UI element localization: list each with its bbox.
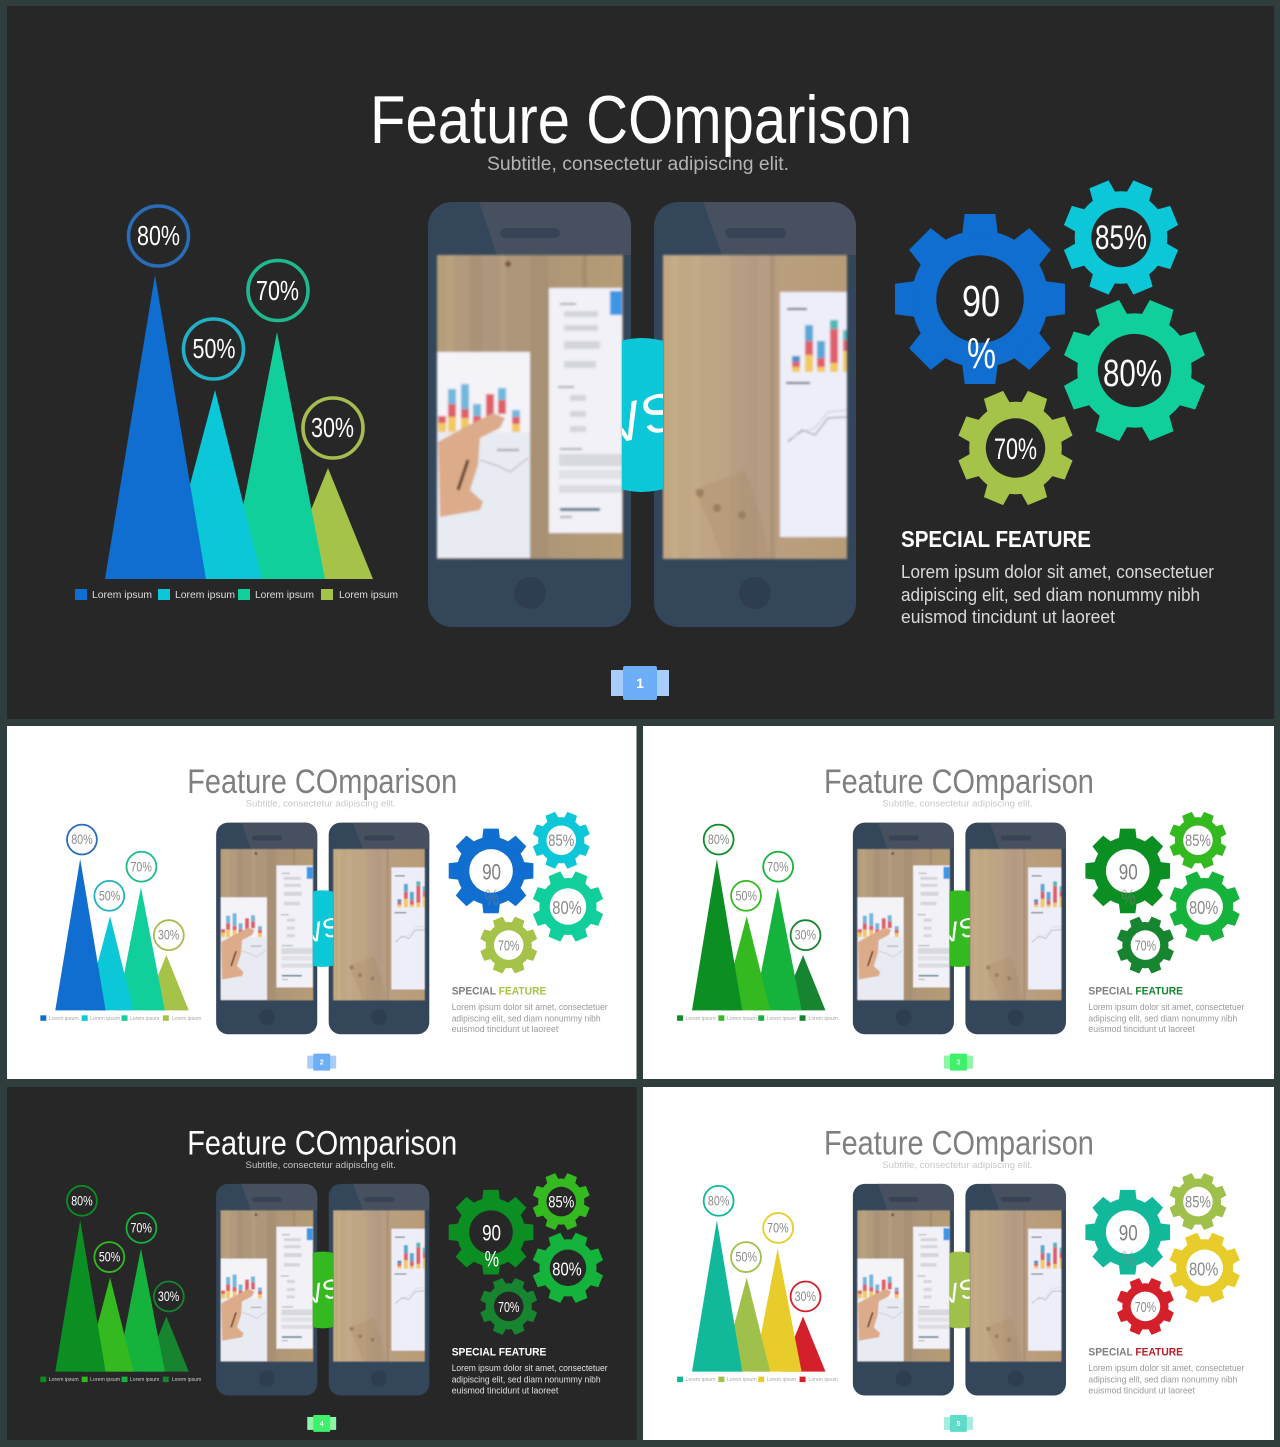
gear 90%: 90 [1119,1221,1138,1246]
special feature body: Lorem ipsum dolor sit amet, consectetuer [452,1002,608,1012]
gear 90% [1085,829,1170,913]
VS badge [949,1252,970,1328]
phones [853,1184,1066,1396]
special feature heading: SPECIAL FEATURE [1088,1347,1183,1359]
page badge 1 [611,666,669,700]
mountain chart [55,1186,189,1372]
special feature heading: SPECIAL FEATURE [1088,985,1183,997]
gear 90%: % [1121,885,1136,910]
label 30%: 30% [158,927,179,943]
special feature body: euismod tincidunt ut laoreet [1088,1386,1195,1396]
page badge 4: 4 [320,1421,324,1428]
subtitle: Subtitle, consectetur adipiscing elit. [882,799,1033,810]
label 50%: 50% [99,887,120,903]
gear 90% [895,214,1065,384]
label 50% [94,881,124,911]
chart legend: Lorem ipsum [130,1016,159,1022]
label 80% [704,825,734,854]
gear 70% [471,1269,546,1344]
special feature body [1088,1002,1244,1034]
gear 80%: 80% [1189,898,1219,919]
label 80% [704,1186,734,1216]
VS badge: VS [599,380,685,457]
chart legend: Lorem ipsum [175,589,235,601]
special feature body: euismod tincidunt ut laoreet [1088,1024,1195,1034]
gear 85% [524,1164,599,1239]
slide 4: dark slide, green palette [7,1087,636,1440]
label 30% [791,920,820,950]
page badge 2: 2 [320,1060,324,1067]
gear 90%: % [485,885,499,910]
label 30% [303,398,363,458]
phones [853,823,1066,1034]
gear 70% [1108,908,1183,983]
special feature body [452,1363,608,1396]
special feature body: adipiscing elit, sed diam nonummy nibh [1088,1375,1237,1385]
special feature body: Lorem ipsum dolor sit amet, consectetuer [452,1363,608,1373]
label 30%: 30% [311,412,354,443]
gear 90% [1085,1190,1170,1275]
label 70%: 70% [256,275,299,306]
title: Feature COmparison [370,82,912,158]
special feature heading: SPECIAL FEATURE [901,526,1091,552]
gear 85% [1046,162,1196,313]
label 70% [763,852,793,882]
label 80%: 80% [71,831,93,847]
label 50%: 50% [192,333,236,364]
page badge 2 [307,1054,336,1071]
slide 3: white slide, green palette [643,726,1274,1079]
gear 90% [449,1190,533,1275]
gear 80%: 80% [1103,353,1162,395]
special feature body: euismod tincidunt ut laoreet [452,1024,559,1034]
VS badge: VS [302,1273,344,1311]
label 30% [791,1282,820,1311]
chart legend: Lorem ipsum [339,589,398,601]
special feature body: adipiscing elit, sed diam nonummy nibh [452,1375,601,1385]
label 80%: 80% [708,831,729,847]
phone photos [437,255,847,559]
label 80% [67,825,97,854]
label 70%: 70% [767,858,789,874]
chart legend [677,1015,838,1022]
special feature body: adipiscing elit, sed diam nonummy nibh [452,1013,601,1023]
special feature body [1088,1363,1244,1396]
chart legend: Lorem ipsum [90,1377,120,1383]
special feature body [901,562,1214,627]
gear 90%: 90 [482,859,501,884]
phone photos [857,1210,1062,1362]
label 50%: 50% [736,1249,757,1265]
chart legend: Lorem ipsum [130,1377,159,1383]
chart legend: Lorem ipsum [767,1377,796,1383]
slide 2: white slide, blue palette [7,726,636,1079]
chart legend: Lorem ipsum [809,1377,838,1383]
slide 1: large dark slide [7,6,1274,719]
chart legend: Lorem ipsum [767,1016,796,1022]
special feature heading: SPECIAL FEATURE [452,985,547,997]
phones [216,1184,429,1396]
gear 70% [940,373,1091,523]
page badge 4 [307,1415,336,1432]
page badge 3: 3 [956,1060,960,1067]
special feature body: Lorem ipsum dolor sit amet, consectetuer [901,562,1214,582]
label 30% [154,920,184,950]
gear 85% [524,803,599,878]
gear 85%: 85% [1185,831,1211,850]
gear 70% [471,908,546,983]
phones [428,202,856,627]
gear 80% [1042,278,1227,463]
subtitle: Subtitle, consectetur adipiscing elit. [246,799,396,810]
VS badge [312,890,334,967]
special feature body: euismod tincidunt ut laoreet [901,607,1115,627]
gear 90%: % [485,1247,499,1272]
chart legend: Lorem ipsum [172,1377,201,1383]
special feature body: Lorem ipsum dolor sit amet, consectetuer [1088,1002,1244,1012]
VS badge [622,338,663,492]
label 50% [731,881,761,911]
gear 80%: 80% [1189,1260,1219,1281]
VS badge: VS [302,911,344,949]
phone photos [857,849,1062,1000]
slide 5: white slide, teal, olive, yellow and red palette [643,1087,1274,1440]
label 50% [731,1242,761,1272]
label 80%: 80% [708,1192,729,1208]
label 70%: 70% [767,1220,789,1236]
subtitle: Subtitle, consectetur adipiscing elit. [246,1160,396,1171]
subtitle: Subtitle, consectetur adipiscing elit. [487,154,789,175]
chart legend: Lorem ipsum [686,1377,715,1383]
gear 80% [1158,1222,1251,1314]
chart legend: Lorem ipsum [49,1016,79,1022]
page badge 3 [944,1054,973,1071]
gear 90%: 90 [482,1221,501,1246]
label 30%: 30% [795,927,816,943]
chart legend [75,589,398,601]
VS badge: VS [938,911,981,949]
chart legend [40,1015,201,1022]
gear 85%: 85% [1185,1192,1211,1211]
gear 80% [522,860,614,953]
gear 90%: 90 [962,277,1000,326]
title: Feature COmparison [187,1125,457,1163]
label 50% [94,1242,124,1272]
gear 80%: 80% [552,1260,582,1281]
special feature body: euismod tincidunt ut laoreet [452,1386,559,1396]
chart legend: Lorem ipsum [172,1016,201,1022]
gear 70%: 70% [1135,1299,1156,1316]
title: Feature COmparison [824,763,1094,801]
page badge 5 [944,1415,973,1432]
mountain chart [692,1186,825,1372]
chart legend: Lorem ipsum [727,1377,757,1383]
mountain chart [105,206,373,579]
title: Feature COmparison [824,1125,1094,1163]
gear 90% [449,829,533,913]
gear 70%: 70% [498,1299,519,1316]
gear 85%: 85% [548,831,574,850]
chart legend: Lorem ipsum [727,1016,757,1022]
gear 80% [1158,860,1251,953]
special feature body [452,1002,608,1034]
phone photos [221,849,425,1000]
label 70%: 70% [130,1220,152,1236]
chart legend: Lorem ipsum [255,589,314,601]
gear 90%: % [1121,1247,1136,1272]
label 70% [763,1213,793,1243]
label 50% [184,319,244,379]
label 80%: 80% [137,220,180,251]
label 30% [154,1282,184,1311]
gear 80%: 80% [552,898,582,919]
VS badge [312,1252,334,1328]
chart legend: Lorem ipsum [90,1016,120,1022]
mountain chart [55,825,189,1010]
chart legend [40,1377,201,1383]
VS badge: VS [938,1273,981,1311]
chart legend: Lorem ipsum [686,1016,715,1022]
chart legend: Lorem ipsum [49,1377,79,1383]
label 30%: 30% [795,1288,816,1304]
gear 85%: 85% [1095,219,1147,257]
label 50%: 50% [99,1249,120,1265]
special feature body: adipiscing elit, sed diam nonummy nibh [1088,1013,1237,1023]
VS badge [949,890,970,967]
gear 90%: 90 [1119,859,1138,884]
gear 90%: % [967,329,996,378]
gear 70%: 70% [498,938,519,955]
subtitle: Subtitle, consectetur adipiscing elit. [882,1160,1033,1171]
label 80%: 80% [71,1192,93,1208]
page badge 1: 1 [636,675,644,691]
chart legend: Lorem ipsum [809,1016,838,1022]
special feature body: Lorem ipsum dolor sit amet, consectetuer [1088,1363,1244,1373]
label 70% [248,260,308,320]
page badge 5: 5 [956,1421,960,1428]
label 70% [127,1213,156,1243]
label 80% [67,1186,97,1216]
label 70%: 70% [130,858,152,874]
special feature body: adipiscing elit, sed diam nonummy nibh [901,585,1200,605]
label 30%: 30% [158,1288,179,1304]
gear 85%: 85% [548,1192,574,1211]
gear 70% [1108,1269,1183,1344]
title: Feature COmparison [187,763,457,801]
label 50%: 50% [736,887,757,903]
mountain chart [692,825,825,1010]
label 70% [127,852,156,882]
gear 85% [1161,1164,1235,1239]
chart legend [677,1377,838,1383]
gear 70%: 70% [994,433,1037,466]
special feature heading: SPECIAL FEATURE [452,1347,547,1359]
gear 85% [1161,803,1235,878]
phones [216,823,429,1034]
chart legend: Lorem ipsum [92,589,152,601]
phone photos [221,1210,425,1362]
gear 70%: 70% [1135,938,1156,955]
label 80% [128,206,188,266]
gear 80% [522,1222,614,1314]
